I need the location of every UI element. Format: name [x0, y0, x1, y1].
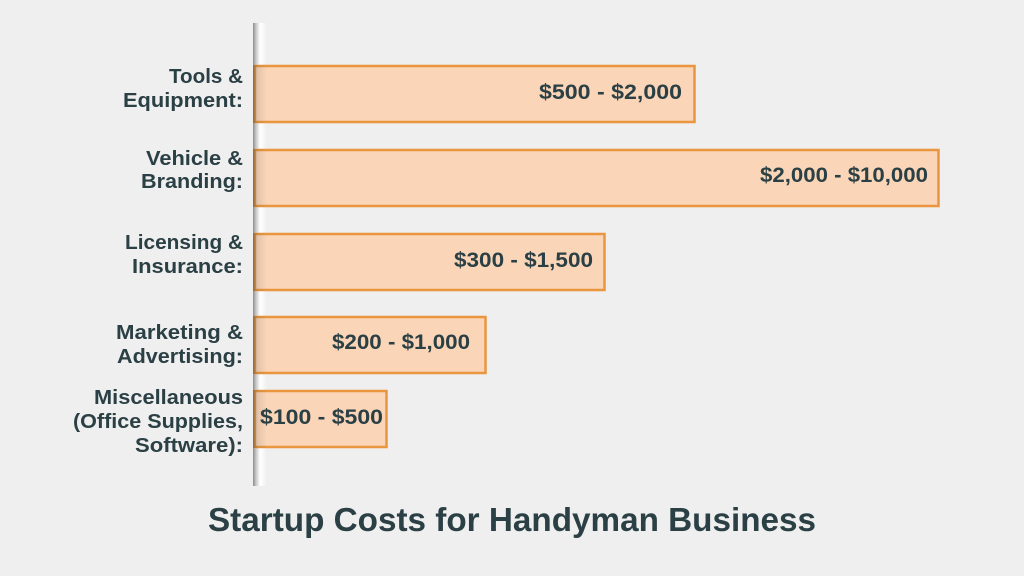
title: Startup Costs for Handyman Business [208, 501, 816, 538]
row: licensing and insurance [125, 232, 604, 291]
row: miscellaneous: (Office Supplies, [73, 411, 243, 433]
row: tools and equipment: Tools & [169, 66, 243, 88]
row: miscellaneous: Software): [135, 435, 243, 457]
row: miscellaneous [73, 387, 386, 457]
row: miscellaneous: Miscellaneous [94, 387, 243, 409]
row: tools and equipment: Equipment: [123, 90, 243, 112]
row: tools and equipment [123, 65, 694, 123]
row: vehicle and branding: Branding: [141, 171, 243, 193]
row: licensing and insurance: Licensing & [125, 232, 243, 254]
row: vehicle and branding [141, 148, 938, 207]
row: marketing and advertising: $200 - $1,000 [332, 331, 470, 354]
row: marketing and advertising: Advertising: [117, 346, 243, 368]
row: tools and equipment: $500 - $2,000 [539, 81, 682, 104]
row: licensing and insurance: Insurance: [132, 256, 243, 278]
row: marketing and advertising: Marketing & [116, 322, 243, 344]
row: miscellaneous: $100 - $500 [260, 406, 383, 429]
chart axis [253, 23, 267, 486]
row: vehicle and branding: Vehicle & [146, 148, 243, 170]
row: vehicle and branding: $2,000 - $10,000 [760, 164, 928, 187]
row: licensing and insurance: $300 - $1,500 [454, 249, 593, 272]
row: marketing and advertising [116, 316, 486, 374]
